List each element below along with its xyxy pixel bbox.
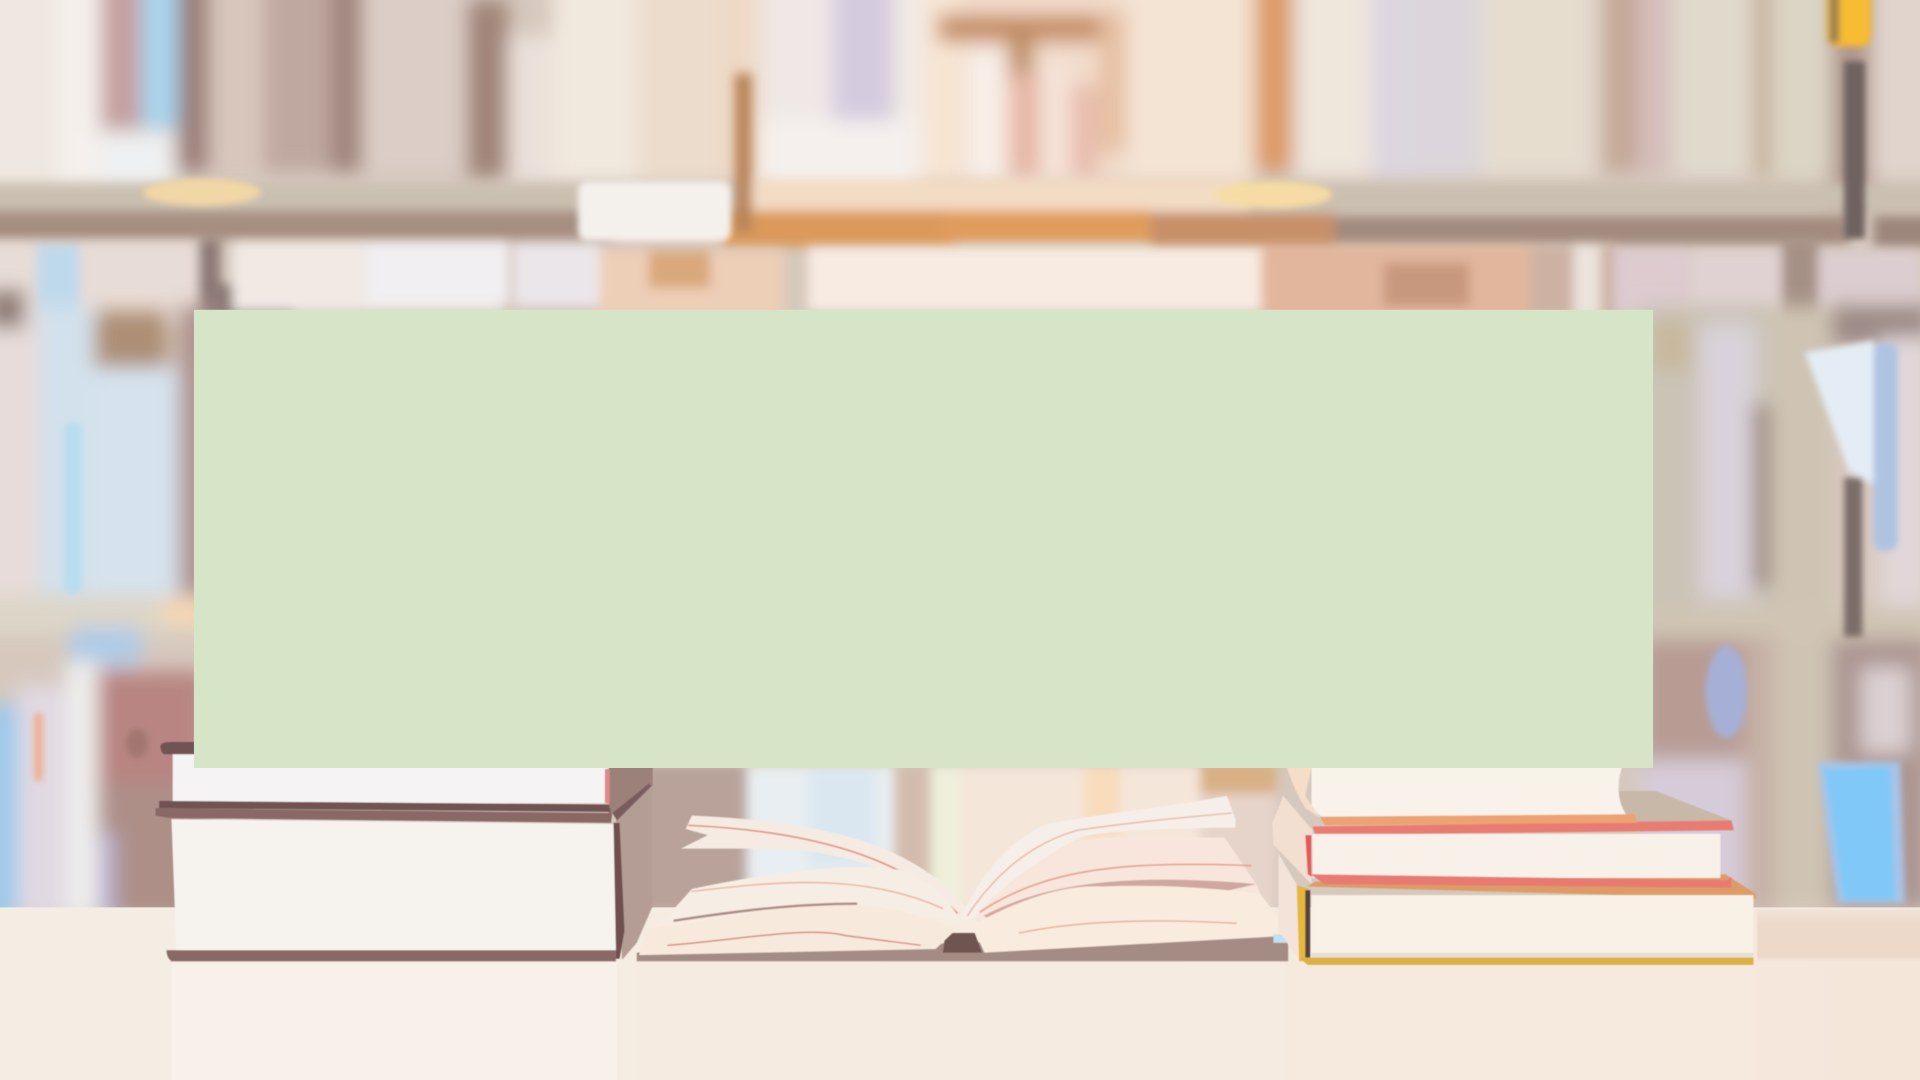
middle book pages (1313, 834, 1720, 878)
left page block (639, 902, 958, 955)
table surface (0, 907, 1920, 1080)
upper shelf plank (0, 73, 1920, 250)
lower book pages (171, 819, 616, 950)
left top leaves (681, 816, 970, 921)
warm arched frame (960, 0, 1127, 184)
upper book pages (173, 754, 609, 803)
bottom book yellow edge (1297, 885, 1309, 961)
left lower leaves (659, 867, 960, 926)
right top leaves (960, 796, 1236, 920)
cover between upper and lower book (159, 801, 611, 812)
bottom book orange top cover (1308, 874, 1756, 899)
middle book red bottom cover (1310, 874, 1731, 888)
under-shelf row of books (0, 239, 1920, 331)
middle book red top cover (1313, 820, 1734, 835)
bottom book pages (1311, 895, 1753, 958)
right book stack (1272, 762, 1756, 965)
base cover (637, 933, 1288, 961)
left middle shelf (0, 291, 216, 918)
right fan fill (975, 838, 1261, 926)
right middle leaves (980, 864, 1251, 912)
upper book cover top (160, 742, 208, 754)
right page block (972, 886, 1293, 953)
open book (637, 796, 1293, 961)
lower book bottom cover (167, 950, 616, 961)
left book stack (156, 742, 653, 961)
panel: pale green content block (194, 310, 1653, 768)
spine side of upper book (609, 759, 653, 813)
right middle shelf (1641, 306, 1920, 912)
background between books (643, 762, 1276, 916)
bottom book left spine (1278, 853, 1298, 958)
side of lower book (616, 786, 653, 960)
upper shelf books (0, 0, 1920, 208)
middle book grey top (1616, 791, 1731, 823)
top book pages (1311, 762, 1629, 818)
middle book spine (1272, 796, 1313, 884)
